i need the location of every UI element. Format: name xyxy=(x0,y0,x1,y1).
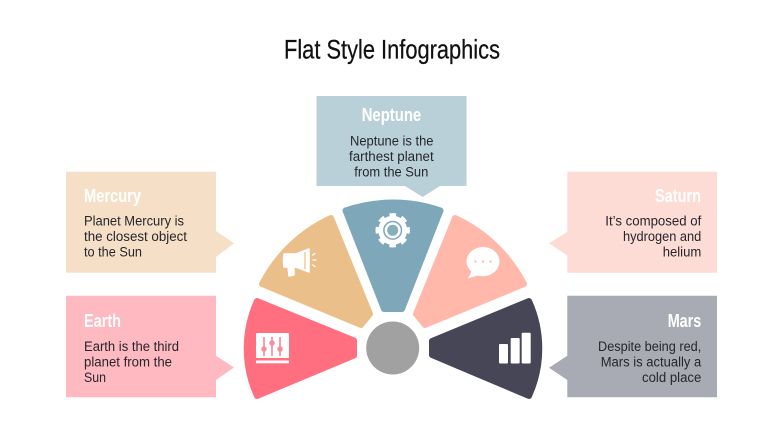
panel: Neptune: farthest planet xyxy=(349,149,434,164)
panel: Mars: Despite being red, xyxy=(598,339,701,354)
panel: Earth: Sun xyxy=(84,370,106,385)
panel: Saturn: It’s composed of xyxy=(605,214,702,229)
panel: Mars: Mars is actually a xyxy=(601,354,702,370)
panel: Neptune: from the Sun xyxy=(354,165,428,180)
panel: Earth: Earth xyxy=(84,311,121,331)
center circle xyxy=(366,322,419,374)
panel: Mars: cold place xyxy=(642,370,701,385)
title: Flat Style Infographics xyxy=(284,34,500,64)
panel: Saturn: hydrogen and xyxy=(623,229,701,244)
panel: Mars xyxy=(549,296,717,397)
panel: Saturn xyxy=(549,172,717,273)
panel: Mercury: the closest object xyxy=(84,229,187,244)
panel: Saturn: Saturn xyxy=(655,186,701,206)
panel: Mercury xyxy=(66,172,234,273)
segment: Saturn xyxy=(416,218,524,325)
segment: Earth xyxy=(247,301,354,396)
panel: Earth: Earth is the third xyxy=(84,339,179,354)
panel: Earth: planet from the xyxy=(84,354,172,370)
panel: Neptune: Neptune xyxy=(362,105,421,125)
panel: Mars: Mars xyxy=(668,311,701,331)
icon: sliders xyxy=(256,333,289,363)
icon: speech bubble xyxy=(466,247,500,278)
segment: Mars xyxy=(432,301,539,396)
icon: gear xyxy=(377,215,408,246)
panel: Neptune: Neptune is the xyxy=(350,134,434,149)
panel: Mercury: to the Sun xyxy=(84,245,142,260)
segment: Neptune xyxy=(346,203,440,309)
panel: Neptune xyxy=(316,96,466,197)
segment: Mercury xyxy=(262,218,370,325)
icon: megaphone xyxy=(284,249,316,276)
panel: Mercury: Planet Mercury is xyxy=(84,214,184,229)
panel: Mercury: Mercury xyxy=(84,186,141,206)
panel: Saturn: helium xyxy=(663,245,701,260)
panel: Earth xyxy=(66,296,234,397)
icon: bar chart xyxy=(499,333,531,364)
